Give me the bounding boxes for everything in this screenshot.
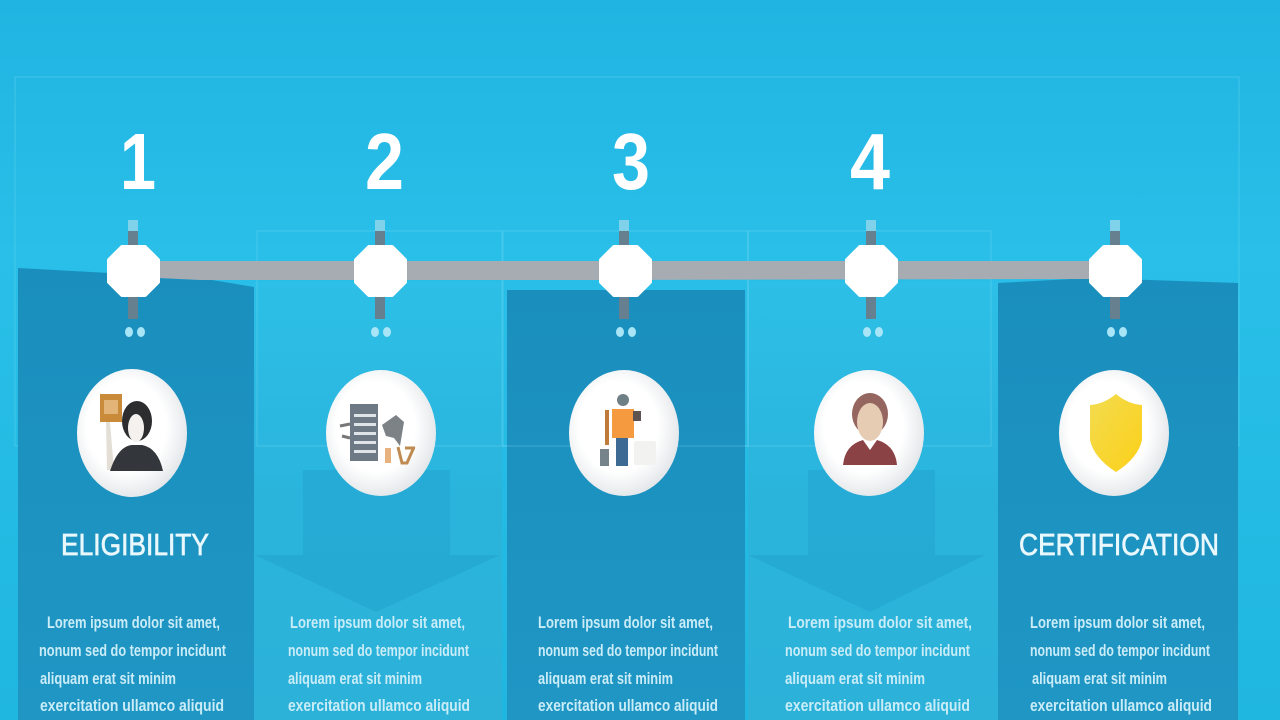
- arrow: step 4 down arrow: [748, 470, 985, 612]
- panel: step 4 column: [748, 282, 998, 720]
- timeline node 2: [356, 220, 405, 337]
- text block: step 3: [538, 613, 718, 715]
- number 3: 3: [612, 117, 650, 206]
- text block: step 3: exercitation ullamco aliquid: [538, 696, 718, 715]
- timeline node 1: [109, 220, 158, 337]
- number 2: 2: [365, 117, 404, 206]
- step numbers: [120, 117, 890, 206]
- timeline node 3: [601, 220, 650, 337]
- panel: outer frame: [15, 77, 1239, 446]
- text block: step 1: [39, 613, 226, 715]
- text block: step 2: Lorem ipsum dolor sit amet,: [290, 613, 465, 632]
- text block: step 1: aliquam erat sit minim: [40, 669, 176, 688]
- text block: step 5: nonum sed do tempor incidunt: [1030, 641, 1210, 660]
- text block: step 2: exercitation ullamco aliquid: [288, 696, 470, 715]
- heading: eligibility: ELIGIBILITY: [61, 527, 209, 562]
- icon: eligibility person with sign: [77, 369, 187, 497]
- text block: step 5: [1030, 613, 1212, 715]
- text block: step 4: [785, 613, 972, 715]
- text block: step 4: nonum sed do tempor incidunt: [785, 641, 970, 660]
- arrow: step 2 down arrow: [255, 470, 500, 612]
- text block: step 2: nonum sed do tempor incidunt: [288, 641, 469, 660]
- number 4: 4: [850, 117, 890, 206]
- text block: step 5: aliquam erat sit minim: [1032, 669, 1167, 688]
- text block: step 2: [288, 613, 470, 715]
- panel: step 5 column: [998, 278, 1238, 720]
- icon: yellow shield: [1059, 370, 1169, 496]
- text block: step 3: nonum sed do tempor incidunt: [538, 641, 718, 660]
- text block: step 4: aliquam erat sit minim: [785, 669, 925, 688]
- icon: person avatar: [814, 370, 924, 496]
- text block: step 3: aliquam erat sit minim: [538, 669, 673, 688]
- panel outlines: middle steps: [257, 231, 991, 446]
- panel: step 2 column: [254, 282, 502, 720]
- heading: certification: CERTIFICATION: [1019, 527, 1219, 562]
- text block: step 4: exercitation ullamco aliquid: [785, 696, 970, 715]
- text block: step 1: exercitation ullamco aliquid: [40, 696, 224, 715]
- text block: step 1: Lorem ipsum dolor sit amet,: [47, 613, 220, 632]
- number 1: 1: [120, 117, 156, 206]
- text block: step 3: Lorem ipsum dolor sit amet,: [538, 613, 713, 632]
- icon: document stack and tools: [326, 370, 436, 496]
- timeline node 5: [1091, 220, 1140, 337]
- timeline node 4: [847, 220, 896, 337]
- text block: step 5: Lorem ipsum dolor sit amet,: [1030, 613, 1205, 632]
- text block: step 4: Lorem ipsum dolor sit amet,: [788, 613, 972, 632]
- text block: step 1: nonum sed do tempor incidunt: [39, 641, 226, 660]
- panel: step 3 column: [507, 290, 745, 720]
- text block: step 5: exercitation ullamco aliquid: [1030, 696, 1212, 715]
- timeline bar: [158, 261, 1090, 280]
- text block: step 2: aliquam erat sit minim: [288, 669, 422, 688]
- panel: step 1 column: [18, 268, 254, 720]
- icon: worker in orange shirt: [569, 370, 679, 496]
